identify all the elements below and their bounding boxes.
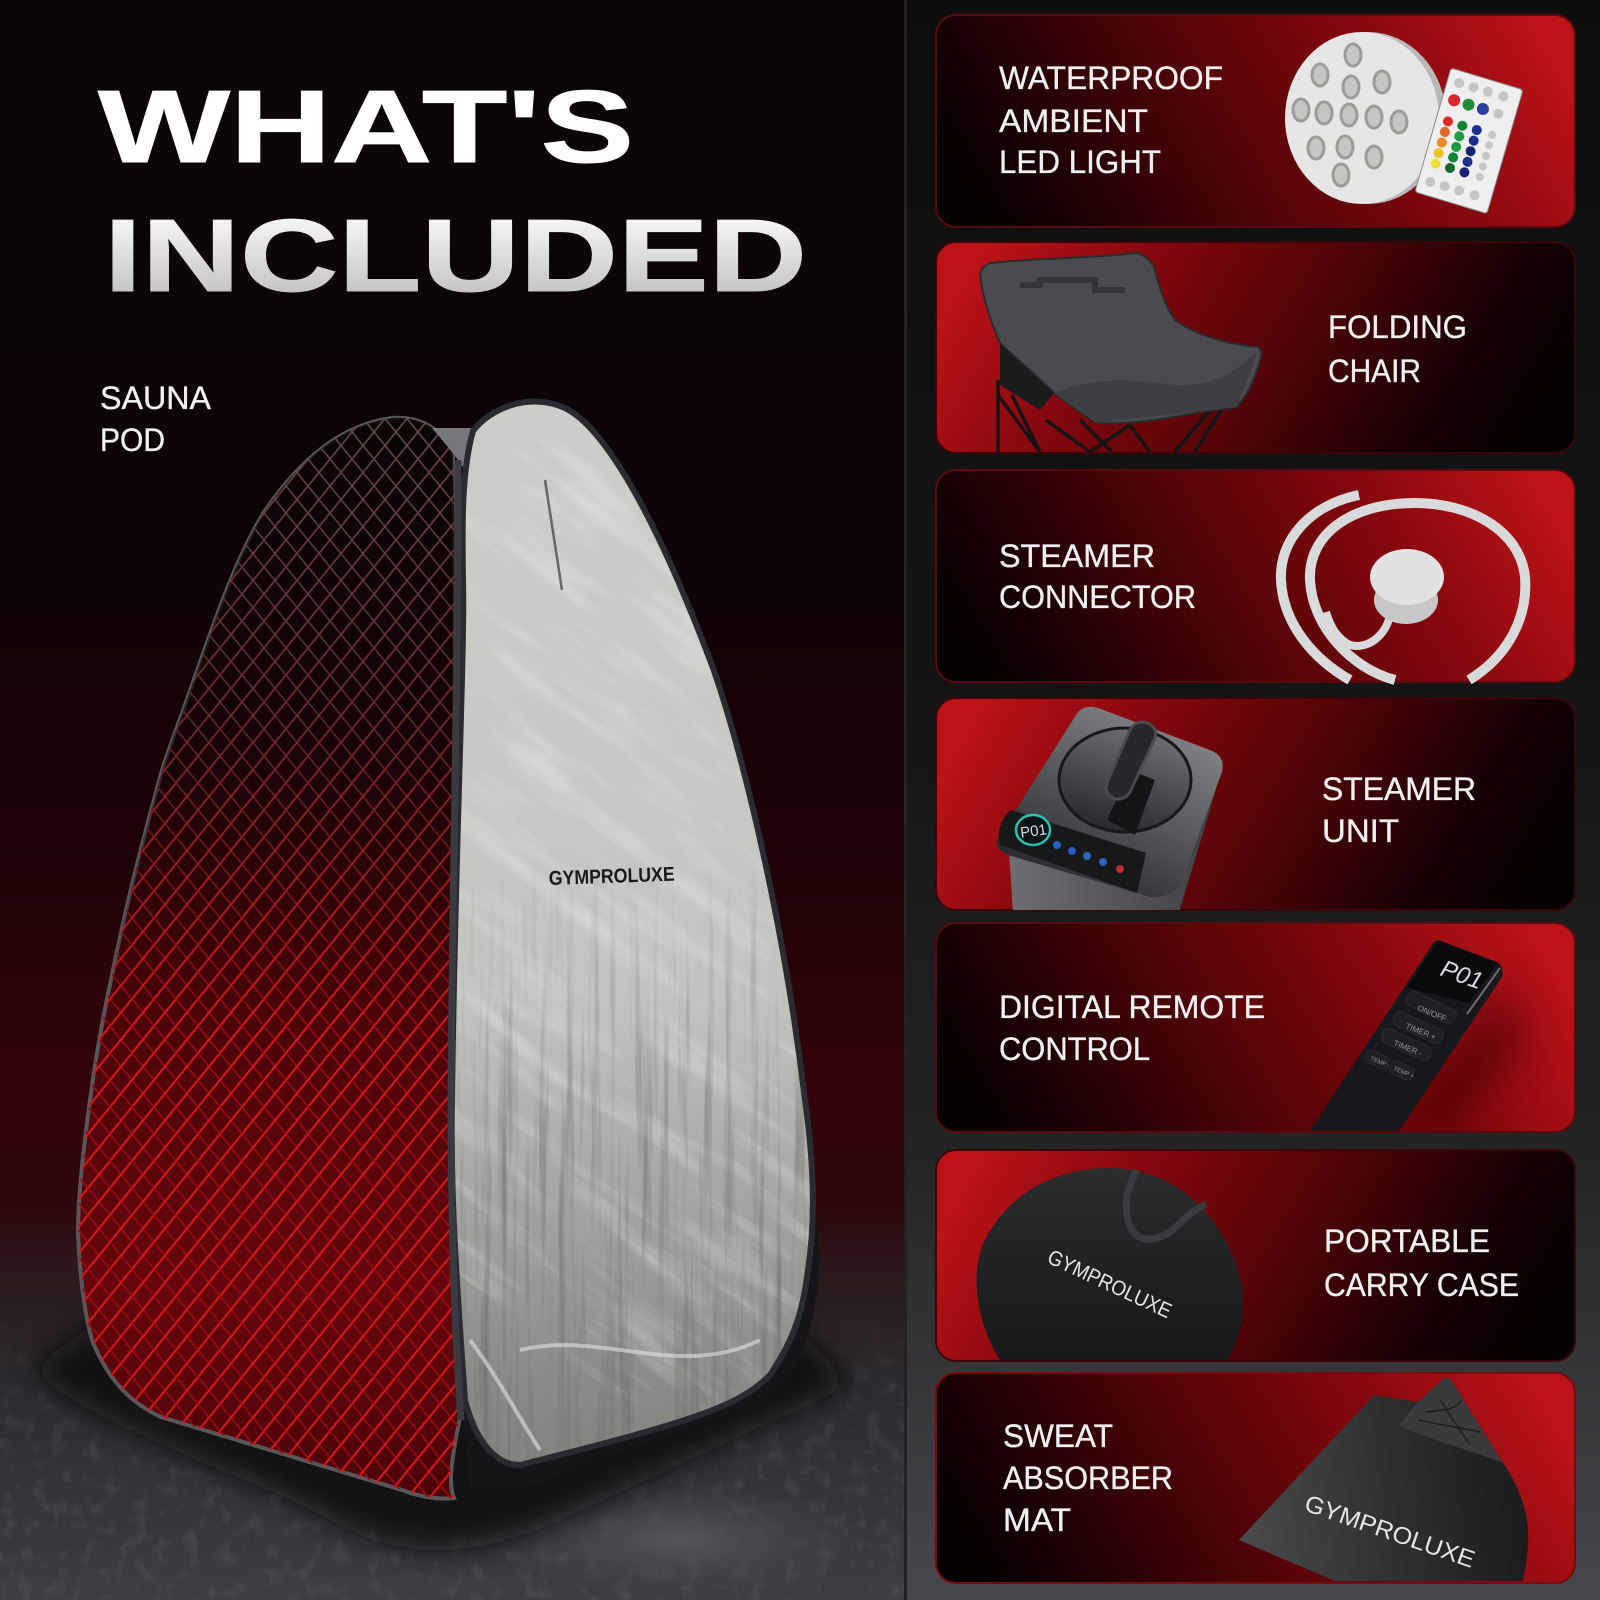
text [1324, 1223, 1519, 1303]
panel: steamer unit [936, 698, 1575, 912]
text [1328, 309, 1467, 389]
text: ABSORBER [1003, 1460, 1173, 1496]
text: SWEAT [1003, 1418, 1113, 1454]
text [1322, 771, 1476, 849]
text: STEAMER [1322, 771, 1476, 807]
pod: left quilted panel [78, 418, 460, 1499]
text: CONNECTOR [999, 579, 1196, 615]
panel: sweat absorber mat [936, 1373, 1575, 1583]
panel: portable carry case [936, 1150, 1575, 1361]
text: CONTROL [999, 1031, 1150, 1067]
panel: folding chair [936, 242, 1575, 453]
text: FOLDING [1328, 309, 1467, 345]
icon: led puck and remote [1285, 32, 1523, 214]
text [999, 989, 1265, 1067]
text: sauna pod label: POD [100, 422, 165, 458]
icon: steamer unit [996, 707, 1223, 912]
text: AMBIENT [999, 103, 1148, 139]
text: sauna pod label [100, 380, 212, 458]
panel: left background [0, 0, 906, 1600]
title: WHAT'S [98, 69, 634, 184]
icon: carry case: GYMPROLUXE [1044, 1246, 1175, 1323]
text: WATERPROOF [999, 60, 1223, 96]
remote shadow [1400, 985, 1525, 1130]
pod brand: GYMPROLUXE [548, 864, 675, 890]
icon: carry case [977, 1168, 1243, 1360]
text [999, 60, 1223, 180]
icon: remote: TEMP - [1369, 1056, 1390, 1069]
icon: hose connector [1281, 495, 1525, 680]
text: PORTABLE [1324, 1223, 1490, 1259]
title [98, 69, 807, 313]
pod seam [451, 460, 461, 1420]
text: LED LIGHT [999, 144, 1161, 180]
icon: mat: GYMPROLUXE [1301, 1490, 1478, 1574]
text [999, 538, 1196, 615]
text: CHAIR [1328, 353, 1421, 389]
pod: dark lower hem [460, 1150, 820, 1490]
text: STEAMER [999, 538, 1155, 574]
panel: waterproof ambient led light [936, 15, 1575, 227]
text: MAT [1003, 1502, 1071, 1538]
text: sauna pod label: SAUNA [100, 380, 212, 416]
icon: mat [1239, 1378, 1528, 1581]
panel: steamer connector [936, 470, 1575, 682]
floor shadow [30, 1320, 850, 1550]
text: UNIT [1322, 813, 1399, 849]
icon: remote: TEMP + [1392, 1066, 1415, 1080]
chair legs [998, 380, 1224, 452]
pod: right silver panel [454, 398, 816, 1468]
text: CARRY CASE [1324, 1267, 1519, 1303]
panel: right column background [904, 0, 1600, 1600]
icon: remote: ON/OFF [1416, 1004, 1448, 1023]
title: INCLUDED [104, 198, 807, 313]
icon: remote [1310, 940, 1503, 1131]
panel: digital remote control [936, 923, 1575, 1132]
icon: remote: TIMER + [1404, 1022, 1437, 1042]
icon: steamer unit: P01 [1019, 821, 1048, 842]
text: DIGITAL REMOTE [999, 989, 1265, 1025]
text [1003, 1418, 1173, 1538]
pod: top gusset [432, 428, 475, 470]
icon: remote: P01 [1437, 955, 1486, 995]
sauna pod [30, 398, 850, 1565]
icon: folding chair [980, 253, 1261, 452]
icon: remote: TIMER - [1392, 1039, 1424, 1058]
